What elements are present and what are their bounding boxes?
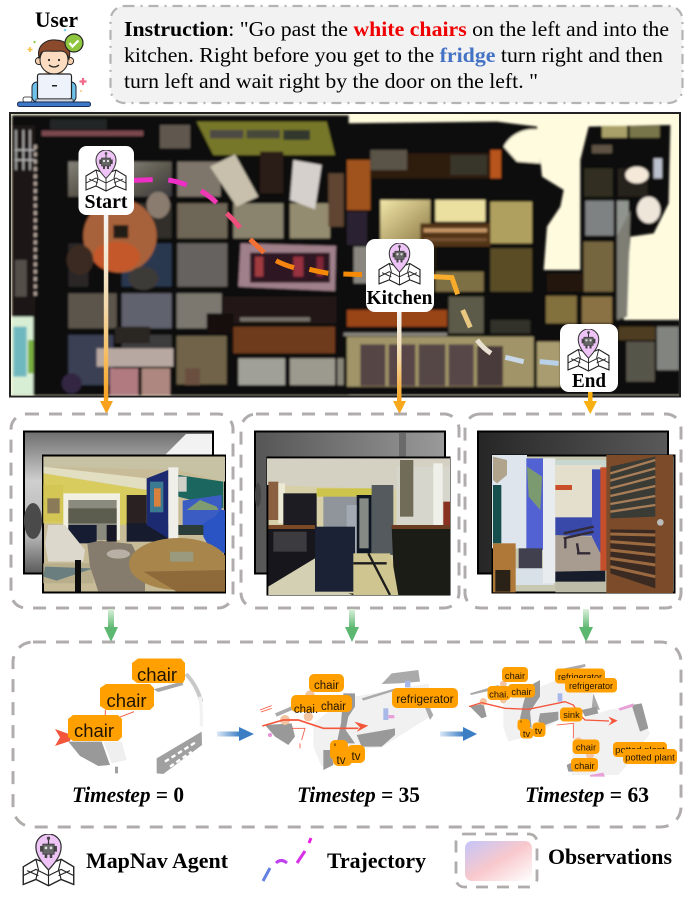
label: refrigerator (behind) (555, 668, 605, 684)
label: chair (502, 667, 528, 682)
label: tv: tv (337, 755, 346, 767)
arrow: start to first observation (100, 215, 113, 414)
label: tv (520, 728, 534, 739)
arrow: kitchen to second observation (393, 312, 406, 414)
label: tv: ' (334, 743, 336, 755)
legend: trajectory icon (263, 838, 311, 881)
label: chair: chair (137, 664, 177, 685)
label: refrigerator (565, 678, 617, 692)
arrow: green from panel 3 (579, 609, 593, 642)
arrow: green from panel 2 (345, 609, 359, 642)
label: chair: chair (74, 720, 114, 741)
label: tv (330, 740, 348, 760)
user heading: User (35, 7, 78, 32)
label: refrigerator (behind): refrigerator (558, 672, 602, 682)
trajectory on map (134, 180, 559, 363)
label: chair (100, 684, 154, 711)
instruction text line 2: kitchen. Right before you get to the fridge turn right and then (124, 43, 663, 67)
label: chair: chair (321, 701, 346, 713)
label: chair: chair (574, 761, 595, 771)
panel: observations at start (11, 414, 233, 608)
left half of the map (zoomed coordinates) (12, 115, 351, 395)
marker: start: Start (84, 191, 128, 213)
icon: user with laptop (18, 29, 90, 107)
front view image: kitchen (267, 458, 453, 595)
label: tv: ' (520, 719, 522, 729)
label: chair (571, 758, 598, 772)
label: chair (68, 715, 122, 741)
label: refrigerator: refrigerator (569, 681, 613, 691)
label: tv (333, 750, 352, 767)
instruction callout (110, 6, 682, 103)
marker: kitchen (366, 239, 434, 312)
label: chair (572, 740, 600, 754)
label: chair (132, 658, 185, 685)
legend: trajectory label: Trajectory (327, 848, 427, 873)
label: chair (318, 695, 352, 713)
panel: observations in kitchen (241, 414, 459, 608)
right half of the map (zoomed coordinates) (344, 122, 680, 395)
legend: agent icon (23, 834, 74, 886)
arrow: timestep 35 to 63 (440, 727, 477, 741)
back view image (255, 432, 445, 574)
semantic map: timestep 35 (260, 670, 458, 770)
label: chair: chair (576, 742, 596, 752)
label: tv: tv (535, 726, 542, 736)
label: sink (560, 708, 582, 722)
caption: timestep 63: Timestep = 63 (525, 782, 649, 807)
label: tv: tv (352, 751, 361, 763)
caption: timestep 0: Timestep = 0 (72, 782, 184, 807)
marker: start (78, 146, 134, 215)
label: tv (518, 719, 530, 731)
label: sink: sink (563, 710, 580, 720)
label: chair: chair (511, 687, 532, 697)
label: tv: tv (523, 729, 530, 739)
caption: timestep 35: Timestep = 35 (297, 782, 420, 807)
instruction text line 3: turn left and wait right by the door on the left. " (124, 69, 538, 93)
legend: observations label: Observations (548, 844, 672, 869)
semantic map: timestep 63 (469, 664, 677, 777)
label: chair (hidden) (488, 686, 510, 700)
label: chair (hidden): chai. (489, 690, 509, 700)
arrow: timestep 0 to 35 (217, 727, 254, 741)
instruction text line 1: Instruction: "Go past the white chairs on the left and into the (124, 17, 669, 41)
label: chair (309, 674, 344, 692)
arrow: end to third observation (584, 392, 597, 414)
semantic map: timestep 0 (55, 658, 202, 774)
label: chair (hidden): chai. (294, 704, 318, 716)
legend: agent label: MapNav Agent (86, 848, 228, 873)
label: refrigerator (392, 688, 458, 708)
back view image (478, 432, 668, 574)
label: chair: chair (505, 671, 525, 681)
label: chair: chair (314, 680, 339, 692)
label: potted plant (623, 749, 677, 764)
label: tv (532, 722, 546, 737)
arrow: green from panel 1 (104, 609, 118, 642)
marker: end: End (572, 370, 606, 392)
front view image: open door (492, 455, 674, 593)
label: refrigerator: refrigerator (396, 693, 454, 706)
panel: map memory timesteps (13, 642, 681, 827)
marker: end (560, 324, 618, 392)
panel: observations at door (465, 414, 681, 608)
label: potted plant: potted plant (625, 752, 675, 764)
marker: kitchen: Kitchen (366, 287, 432, 309)
front view image: dining room (43, 456, 228, 592)
label: chair (508, 684, 535, 698)
label: potted plant (behind): potted plant (615, 745, 665, 756)
back view image (24, 432, 213, 574)
label: chair: chair (106, 690, 147, 711)
label: tv (347, 745, 365, 763)
label: chair (hidden) (291, 695, 327, 716)
legend: observations icon (456, 834, 537, 887)
label: potted plant (behind) (613, 742, 667, 757)
